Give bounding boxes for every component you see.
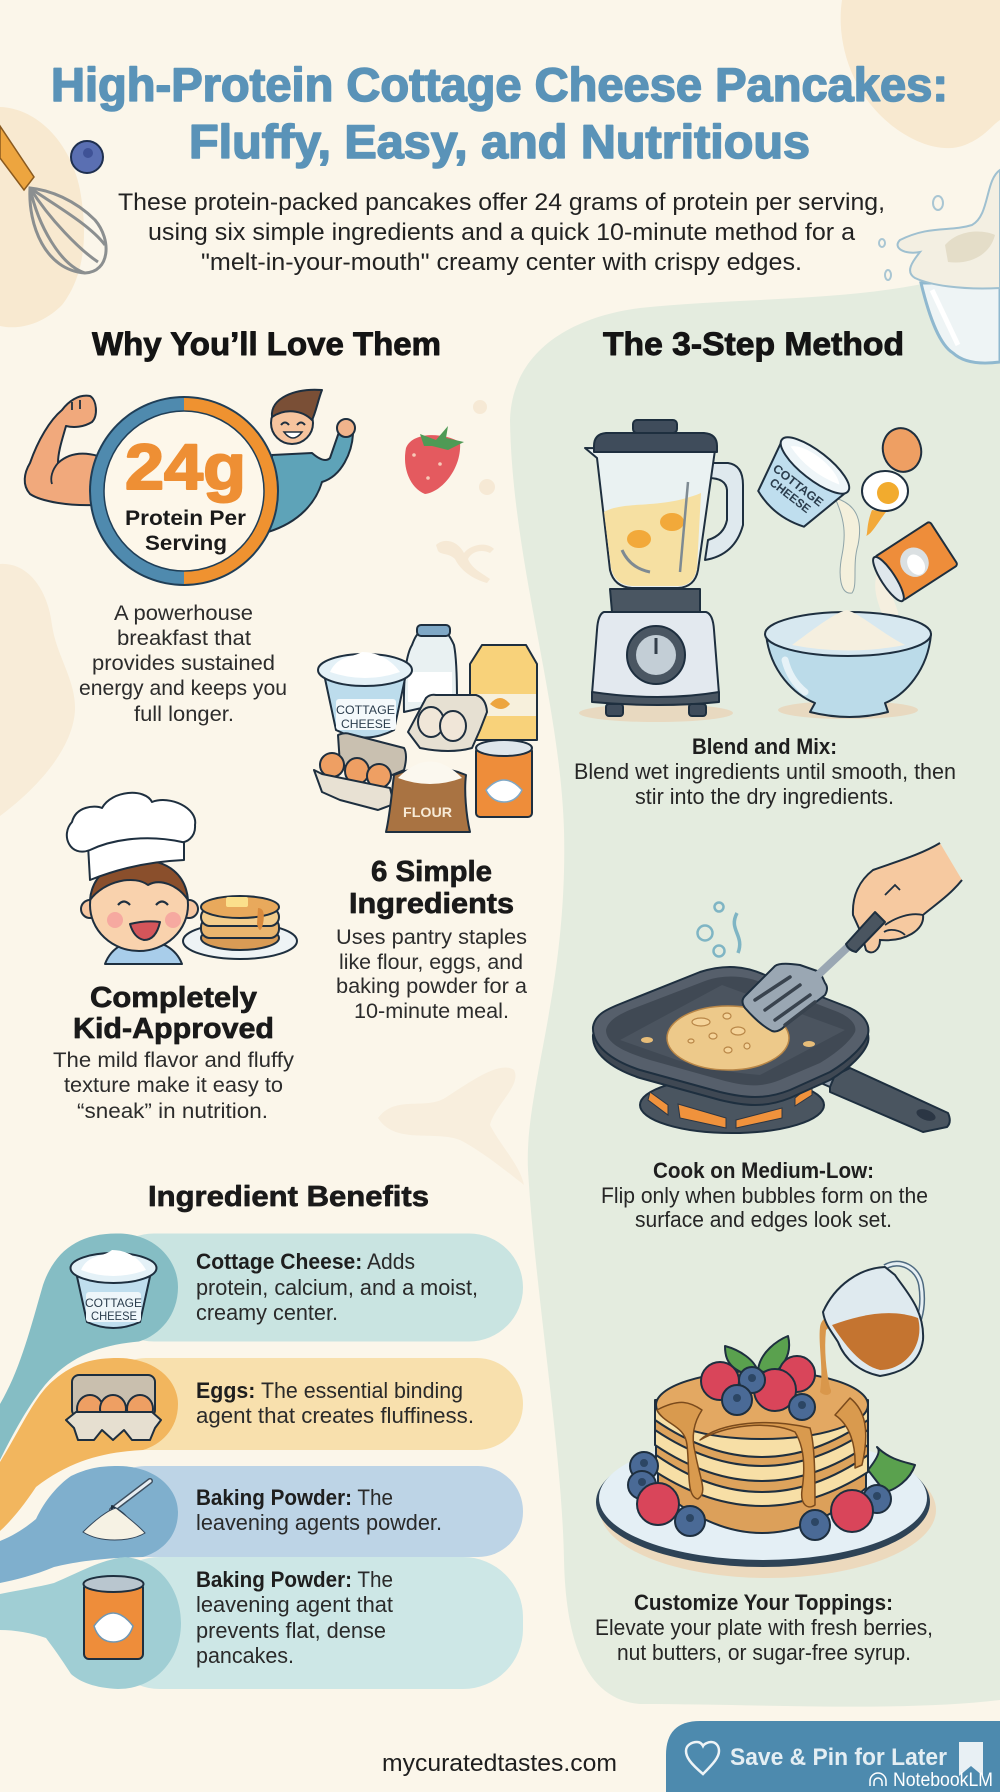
- text: powerhouse breakfast: provides sustained: [92, 652, 275, 675]
- text: leavening agent: prevents flat, dense: [196, 1618, 386, 1643]
- icon: bookmark: [959, 1742, 983, 1776]
- footer website: mycuratedtastes.com: [382, 1750, 617, 1777]
- text: blend and mix: Blend and Mix:: [692, 734, 837, 759]
- icon: bubbles and steam: [698, 902, 740, 956]
- text: mild flavor: “sneak” in nutrition.: [77, 1100, 268, 1123]
- heading: completely kid-approved: [73, 982, 274, 1045]
- title: High-Protein Cottage Cheese Pancakes:: [51, 58, 948, 111]
- open egg carton: [408, 695, 487, 751]
- text: powerhouse breakfast: full longer.: [134, 703, 234, 726]
- text: cottage cheese: Cottage Cheese: Adds: [196, 1249, 415, 1274]
- text: blend and mix: Blend wet ingredients until smooth, then: [574, 759, 956, 784]
- text: cottage cheese: [196, 1249, 478, 1325]
- icon: cheering man: [268, 390, 355, 532]
- text: mild flavor: The mild flavor and fluffy: [53, 1049, 295, 1072]
- text: eggs: agent that creates fluffiness.: [196, 1403, 474, 1428]
- text: powerhouse breakfast: breakfast that: [117, 627, 251, 650]
- decorative milk splash: [378, 1067, 524, 1185]
- icon: whisk: [0, 126, 106, 273]
- flour bag: FLOUR: [403, 804, 452, 820]
- icon: cottage cheese tub: [70, 1250, 156, 1328]
- illustration: tilted cottage cheese tub pouring: COTTAGE: [770, 461, 826, 509]
- chart: protein ring 24g: [89, 396, 279, 586]
- text: cook on medium-low: surface and edges look set.: [635, 1207, 892, 1232]
- heading: 3-step method: The 3-Step Method: [603, 326, 904, 362]
- heading: six simple ingredients: [349, 856, 514, 920]
- icon: tilted powder can: [868, 521, 958, 621]
- text: customize your toppings: [595, 1590, 933, 1665]
- decorative dots and swirl: [436, 400, 495, 583]
- panel: cottage cheese benefit: [0, 1233, 523, 1460]
- icon: egg carton: [66, 1375, 161, 1440]
- intro text: [118, 189, 885, 276]
- text: powerhouse breakfast: energy and keeps you: [79, 677, 287, 700]
- heading: why you'll love them: Why You’ll Love Them: [92, 326, 441, 362]
- text: customize your toppings: Elevate your plate with fresh berries,: [595, 1615, 933, 1640]
- icon: baking powder can: [84, 1576, 144, 1659]
- button label: Save & Pin for Later: [730, 1744, 947, 1771]
- background blob: upper left: [0, 107, 84, 327]
- save and pin button: [666, 1721, 1000, 1792]
- icon: milk glass and splash: [879, 170, 1000, 363]
- cottage cheese tub: COTTAGE: [336, 703, 395, 717]
- text: leavening agent: Baking Powder: The: [196, 1567, 393, 1592]
- flour bag: [386, 762, 470, 832]
- background blob: top right: [841, 0, 1000, 148]
- chart: protein ring 24g: 24g: [125, 431, 246, 503]
- heading: completely kid-approved: Kid-Approved: [73, 1013, 274, 1045]
- text: baking powder: leavening agents powder.: [196, 1510, 442, 1535]
- panel: baking powder benefit: [0, 1466, 523, 1583]
- icon: cottage cheese tub: COTTAGE: [85, 1296, 142, 1310]
- eggs carton: [314, 733, 406, 810]
- title: Fluffy, Easy, and Nutritious: [189, 115, 810, 168]
- icon: chef kid with pancakes: [67, 793, 297, 964]
- heading: ingredient benefits: Ingredient Benefits: [148, 1181, 429, 1213]
- text: blend and mix: stir into the dry ingredients.: [635, 784, 894, 809]
- icon: syrup pitcher: [820, 1264, 923, 1395]
- panel: eggs benefit: [0, 1358, 523, 1531]
- cottage cheese tub: CHEESE: [341, 717, 391, 731]
- text: cook on medium-low: Cook on Medium-Low:: [653, 1158, 874, 1183]
- intro text: These protein-packed pancakes offer 24 grams of protein per serving,: [118, 189, 885, 216]
- background blob: middle left: [0, 564, 75, 816]
- heading: six simple ingredients: Ingredients: [349, 888, 514, 920]
- text: mild flavor: texture make it easy to: [64, 1074, 283, 1097]
- heading: completely kid-approved: Completely: [90, 982, 257, 1014]
- text: cottage cheese: protein, calcium, and a moist,: [196, 1275, 478, 1300]
- text: leavening agent: pancakes.: [196, 1643, 294, 1668]
- text: blend and mix: [574, 734, 956, 809]
- text: customize your toppings: Customize Your Toppings:: [634, 1590, 893, 1615]
- icon: flexed arm: [25, 396, 98, 505]
- icon: whole egg: [878, 424, 926, 476]
- text: leavening agent: [196, 1567, 393, 1668]
- intro text: "melt-in-your-mouth" creamy center with crispy edges.: [201, 249, 802, 276]
- chart: protein ring 24g: Protein Per: [125, 507, 246, 530]
- text: mild flavor: [53, 1049, 295, 1123]
- illustration: six ingredients group: [314, 625, 537, 832]
- text: cottage cheese: creamy center.: [196, 1300, 338, 1325]
- cottage cheese tub: [318, 652, 412, 738]
- text: pantry staples: [336, 926, 527, 1023]
- illustration: pan with pancake and spatula: [593, 945, 950, 1133]
- illustration: tilted cottage cheese tub pouring: CHEESE: [767, 475, 813, 516]
- panel: method background: [510, 262, 1000, 1707]
- watermark: NotebookLM: [893, 1770, 993, 1791]
- chart: protein ring 24g: Serving: [145, 532, 227, 555]
- text: pantry staples: 10-minute meal.: [354, 1000, 509, 1023]
- text: eggs: Eggs: The essential binding: [196, 1378, 463, 1403]
- bottle: [404, 625, 457, 712]
- text: powerhouse breakfast: [79, 602, 287, 726]
- text: cook on medium-low: [601, 1158, 928, 1232]
- text: customize your toppings: nut butters, or sugar-free syrup.: [617, 1640, 911, 1665]
- icon: scoop and powder: [83, 1481, 150, 1540]
- intro text: using six simple ingredients and a quick 10-minute method for a: [148, 219, 856, 246]
- illustration: tilted cottage cheese tub pouring: [745, 429, 860, 593]
- text: baking powder: [196, 1485, 442, 1535]
- icon: heart: [686, 1742, 719, 1774]
- title: [51, 58, 948, 168]
- icon: blueberry: [71, 141, 103, 173]
- can: [476, 740, 532, 817]
- milk carton: [470, 645, 537, 740]
- illustration: blender: [579, 420, 743, 722]
- icon: cottage cheese tub: CHEESE: [91, 1309, 137, 1323]
- text: eggs: [196, 1378, 474, 1428]
- text: leavening agent: leavening agent that: [196, 1592, 393, 1617]
- text: powerhouse breakfast: A powerhouse: [114, 602, 253, 625]
- panel: leavening benefit: [0, 1557, 523, 1689]
- text: pantry staples: like flour, eggs, and: [339, 951, 523, 974]
- icon: cracked egg: [862, 471, 908, 536]
- text: pantry staples: baking powder for a: [336, 975, 527, 998]
- text: cook on medium-low: Flip only when bubbles form on the: [601, 1183, 928, 1208]
- text: pantry staples: Uses pantry staples: [336, 926, 527, 949]
- icon: hand holding spatula: [846, 843, 962, 952]
- icon: strawberry: [405, 426, 464, 494]
- illustration: mixing bowl: [765, 610, 931, 719]
- heading: six simple ingredients: 6 Simple: [371, 856, 492, 888]
- text: baking powder: Baking Powder: The: [196, 1485, 393, 1510]
- illustration: pancake stack with berries and syrup: [596, 1336, 936, 1578]
